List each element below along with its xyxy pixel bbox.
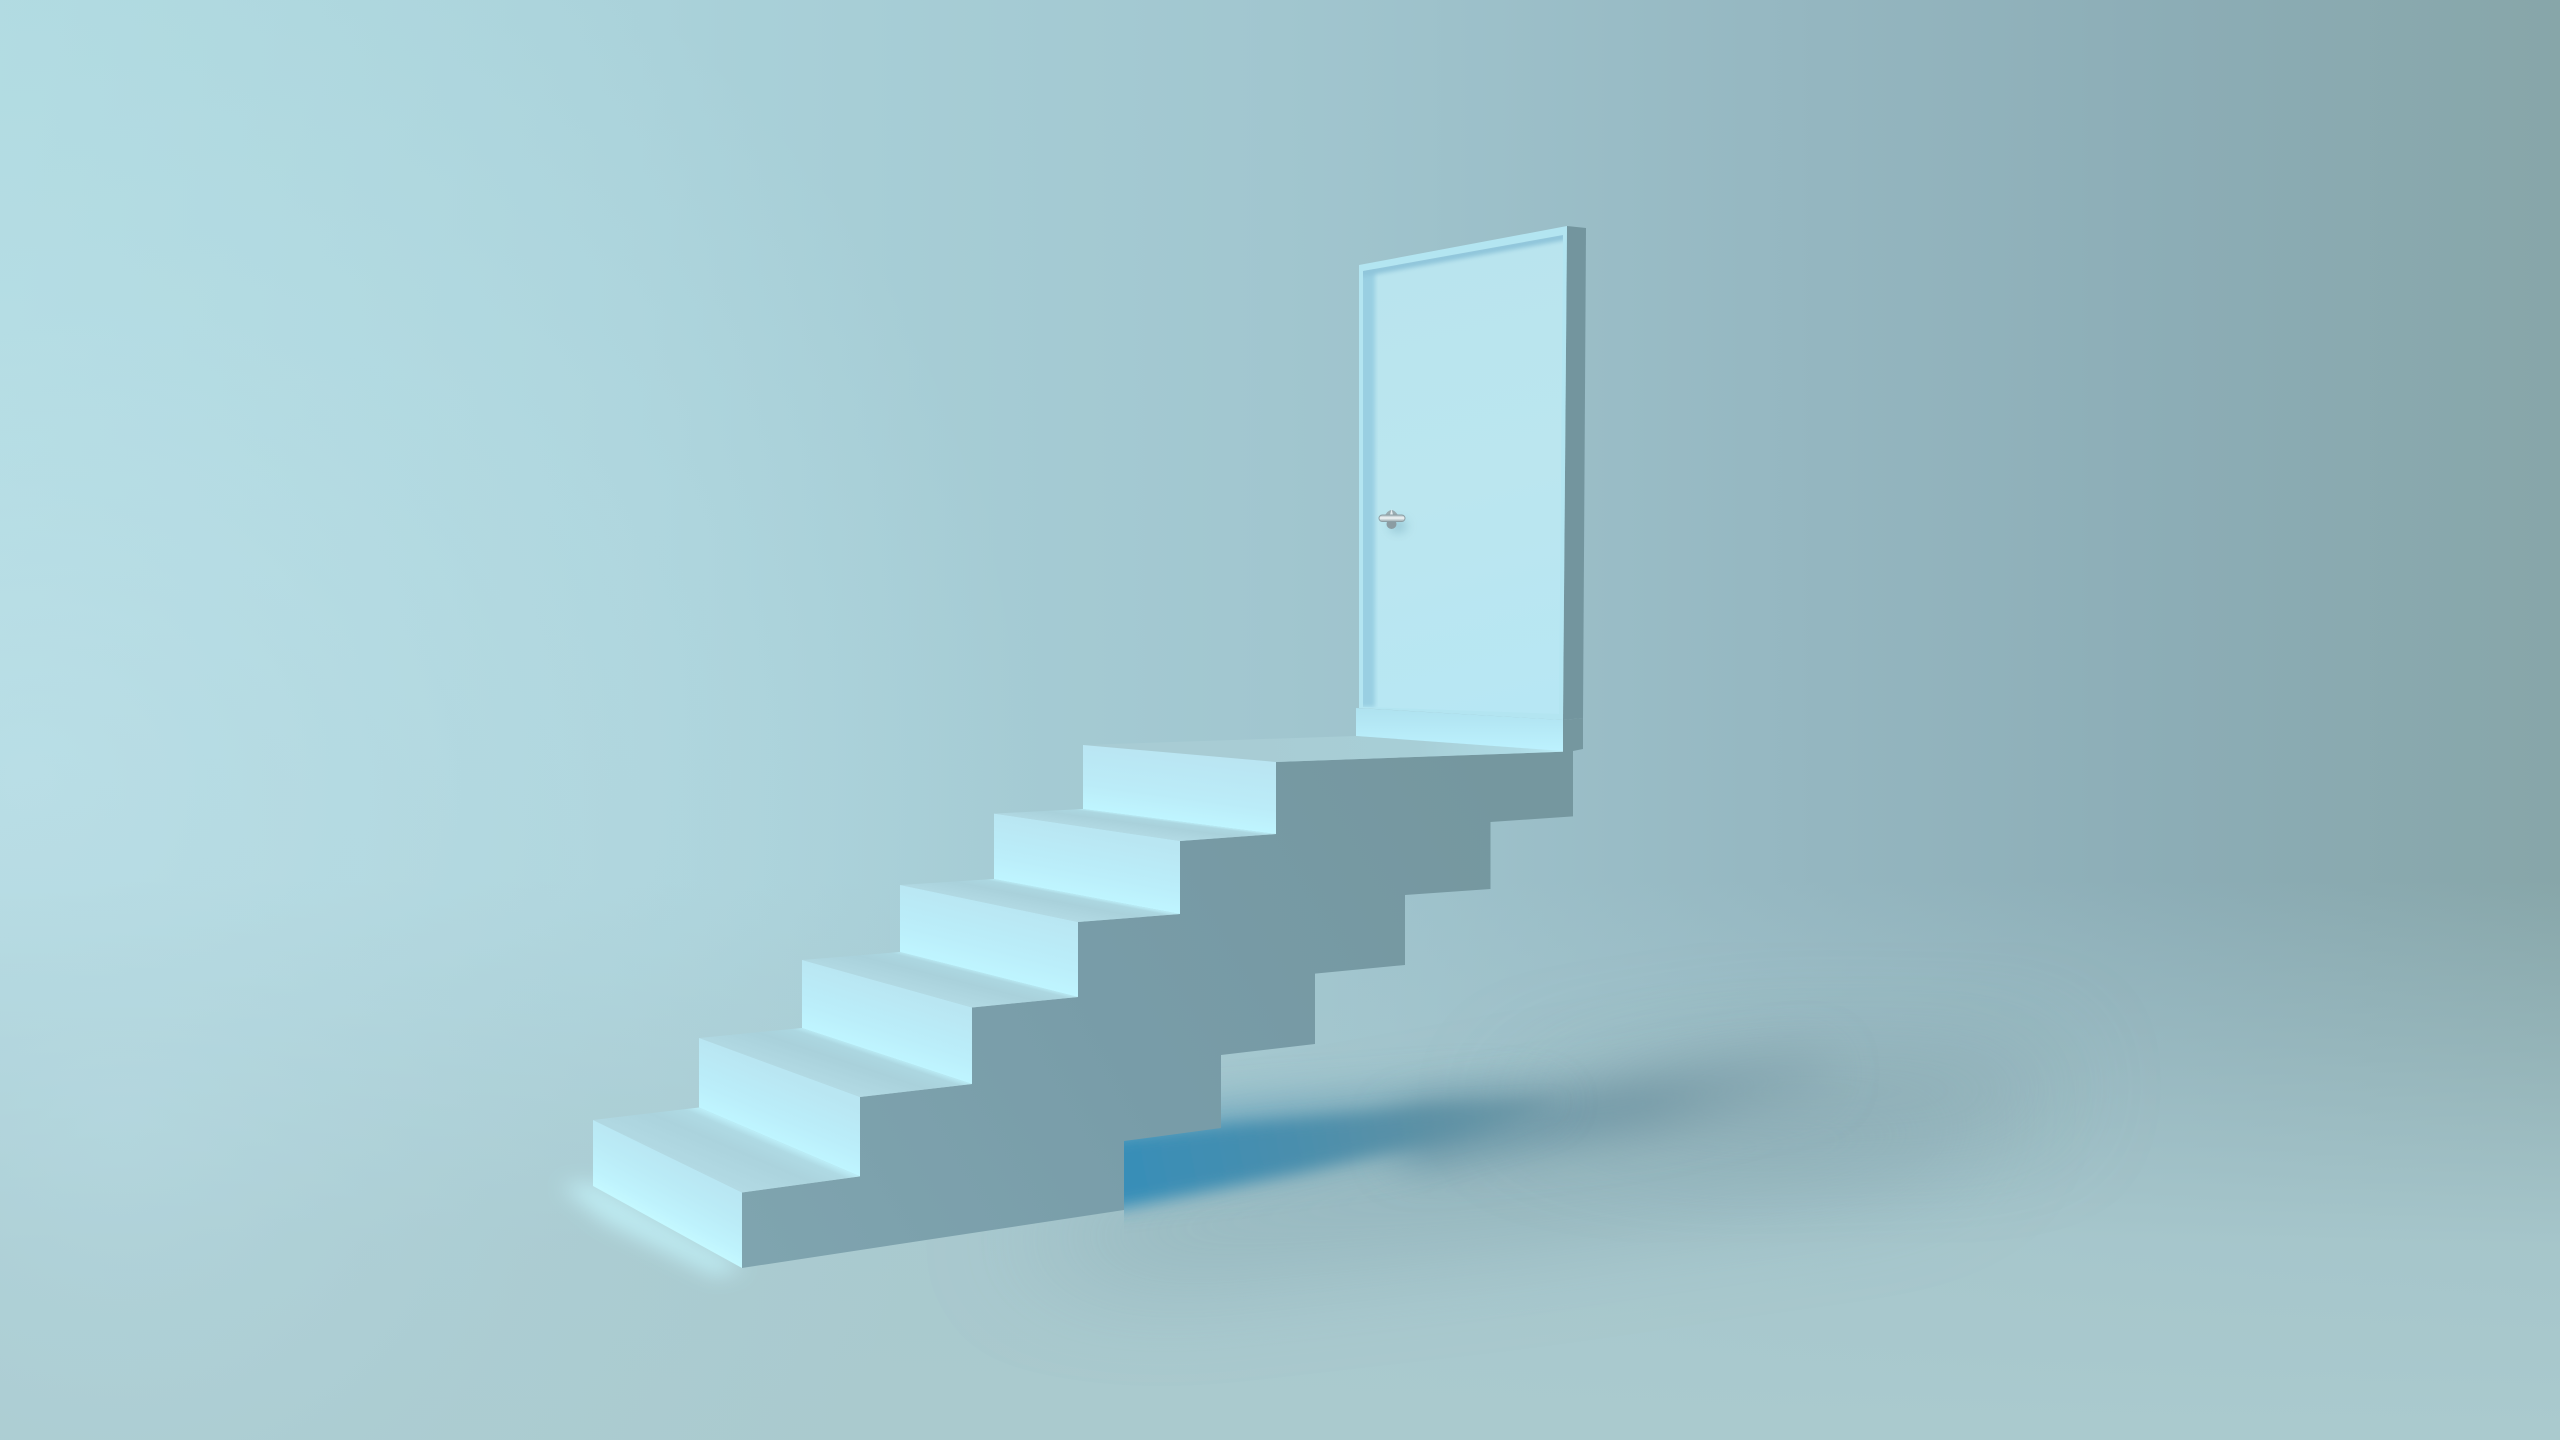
- door threshold side: [1563, 718, 1583, 754]
- step 2: [699, 1028, 972, 1176]
- light glow under first step: [560, 1183, 745, 1276]
- door frame face: [1359, 226, 1567, 720]
- lowest step: [593, 1108, 860, 1268]
- door: [1356, 226, 1586, 754]
- staircase side wall: [742, 751, 1573, 1268]
- door frame side: [1563, 226, 1586, 720]
- step 4: [900, 879, 1180, 997]
- door threshold: [1356, 708, 1563, 751]
- door panel with recess shading: [1360, 230, 1567, 714]
- staircase: [593, 736, 1573, 1268]
- floor shadow cast by staircase: [1000, 1055, 2060, 1270]
- icon: door handle: [1379, 509, 1407, 533]
- step 6 and top landing: [1083, 736, 1573, 834]
- step 5: [994, 809, 1276, 914]
- step 3: [802, 952, 1078, 1084]
